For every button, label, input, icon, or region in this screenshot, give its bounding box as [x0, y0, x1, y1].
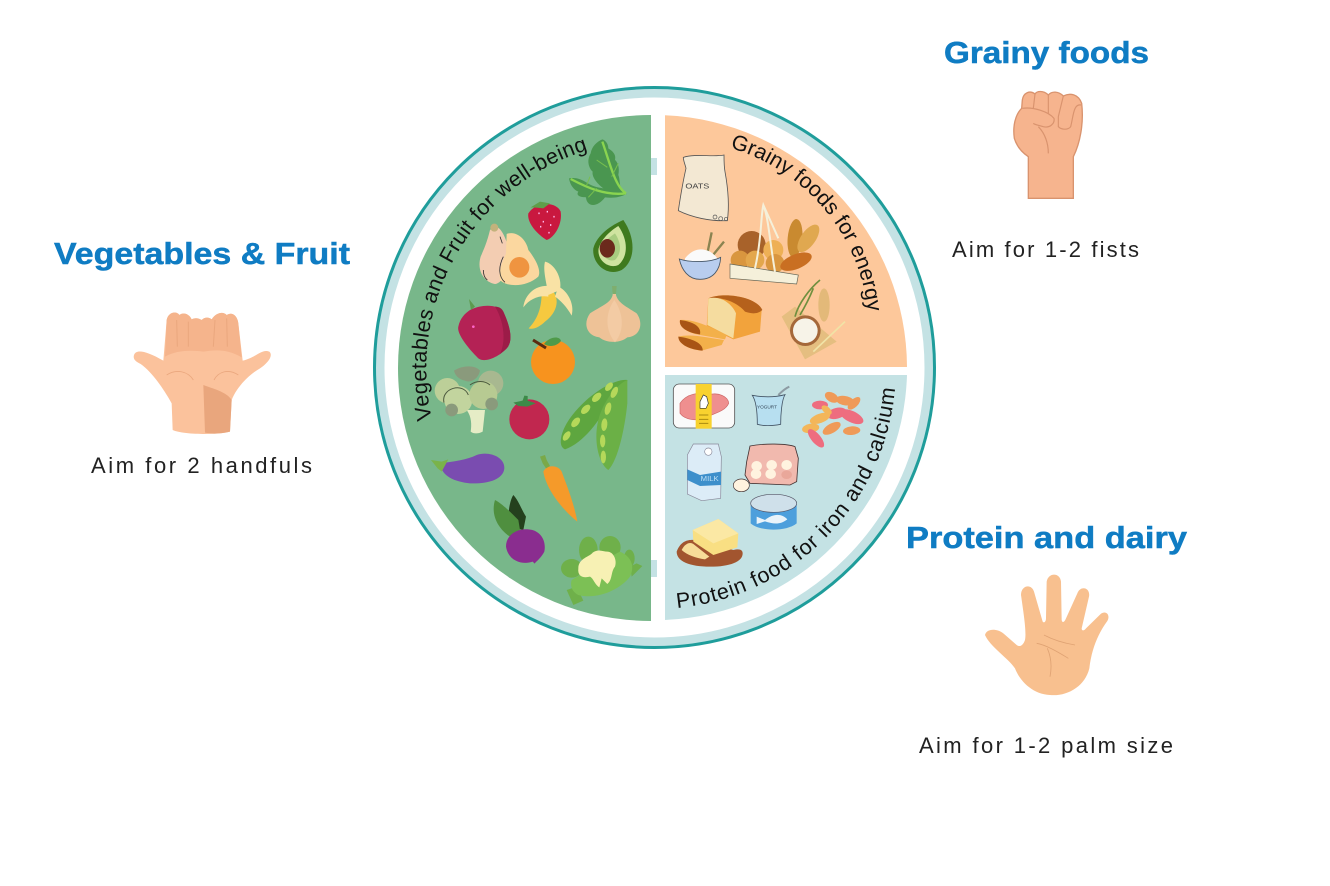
- vegetable icons upper: [458, 139, 640, 360]
- heading: protein and dairy: Protein and dairy: [906, 520, 1188, 555]
- icon: tomato: [509, 396, 549, 439]
- label: protein arc text: Protein food for iron and calcium: [677, 388, 895, 608]
- icon: pea pods: [561, 380, 627, 470]
- icon: flour bag: [678, 155, 728, 221]
- icon: rice and grain stalk: [782, 280, 845, 359]
- divider tick bottom: [651, 560, 657, 577]
- text: aim for 1-2 palm size: Aim for 1-2 palm size: [919, 733, 1173, 758]
- plate rim: [379, 92, 930, 643]
- icon: fist: [1014, 91, 1082, 198]
- icon: beetroot: [494, 495, 545, 564]
- icon: egg carton: [733, 444, 798, 492]
- milk label: MILK: [701, 476, 719, 483]
- icon: red pepper: [458, 299, 510, 360]
- heading: grainy foods: Grainy foods: [944, 35, 1149, 70]
- icon: kale: [569, 139, 627, 205]
- icon: open palm: [985, 575, 1108, 695]
- icon: strawberry: [528, 202, 561, 240]
- panel: vegetables and fruit: [398, 115, 651, 621]
- protein food icons: [673, 384, 866, 567]
- icon: yogurt cup: [752, 387, 789, 426]
- icon: broccoli: [435, 366, 503, 433]
- section: protein and dairy guide: [906, 520, 1188, 758]
- panel: grainy foods: [665, 115, 907, 367]
- label: grainy arc text: Grainy foods for energy: [732, 136, 880, 310]
- icon: avocado: [593, 220, 632, 272]
- yogurt label: YOGURT: [757, 405, 777, 410]
- plate: [373, 86, 936, 649]
- icon: garlic: [586, 286, 640, 342]
- icon: eggplant: [431, 454, 504, 483]
- plate outer ring: [374, 88, 934, 648]
- icon: two cupped hands: [134, 312, 271, 434]
- icon: beans: [801, 390, 866, 450]
- text: aim for 2 handfuls: Aim for 2 handfuls: [91, 453, 312, 478]
- section: grainy foods guide: [944, 35, 1149, 262]
- label: vegetables arc text: Vegetables and Fruit for well-being: [412, 140, 587, 422]
- icon: bread basket: [730, 205, 824, 284]
- icon: cauliflower: [561, 536, 642, 605]
- divider tick top: [651, 158, 657, 175]
- section: vegetables and fruit guide: [54, 236, 350, 478]
- icon: sliced bread loaf: [678, 295, 762, 351]
- heading: vegetables and fruit: Vegetables & Fruit: [54, 236, 350, 271]
- icon: milk carton: [687, 444, 721, 501]
- panel: protein and dairy: [665, 375, 907, 620]
- icon: tuna can: [751, 494, 797, 530]
- icon: butternut squash: [480, 224, 539, 285]
- vegetable icons lower: [431, 366, 642, 605]
- icon: meat tray: [673, 384, 735, 429]
- icon: banana: [523, 262, 572, 329]
- icon: orange: [531, 338, 575, 384]
- icon: butter on board: [677, 519, 743, 567]
- text: aim for 1-2 fists: Aim for 1-2 fists: [952, 237, 1139, 262]
- grainy food icons: [678, 155, 845, 359]
- bag label: OATS: [685, 181, 709, 190]
- icon: carrot: [540, 455, 577, 522]
- icon: rice bowl: [679, 232, 724, 279]
